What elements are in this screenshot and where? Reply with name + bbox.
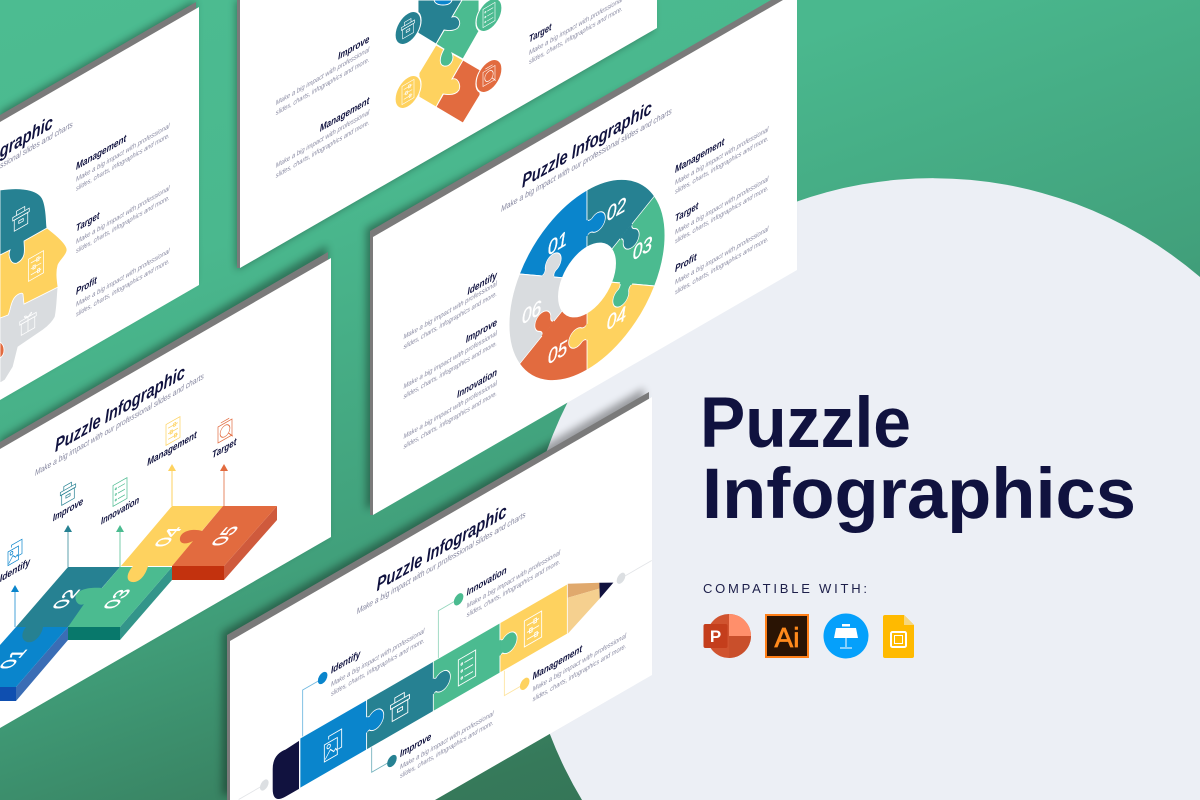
slide text: Management — [147, 429, 197, 469]
slide text: Make a big impact with professional — [76, 247, 170, 309]
panel: top slide with four piece puzzle — [236, 0, 657, 270]
slide text — [0, 43, 170, 418]
slide text: Puzzle Infographic — [377, 499, 507, 595]
step numbers: 04 — [150, 527, 187, 547]
slide text: slides, charts, infographics and more. — [533, 643, 626, 704]
head puzzle pieces — [0, 189, 67, 383]
slide text: Profit — [675, 251, 697, 275]
slide text: slides, charts, infographics and more. — [76, 132, 170, 193]
step numbers: 02 — [48, 589, 85, 609]
slide text: Make a big impact with professional — [76, 185, 170, 246]
slide text: slides, charts, infographics and more. — [467, 558, 560, 619]
slide text: Improve — [400, 731, 432, 760]
slide text: Identify — [468, 270, 497, 298]
slide text: Innovation — [467, 565, 507, 599]
slide text: Make a big impact with professional — [76, 122, 170, 184]
icon: gift — [20, 310, 36, 336]
slide text: Make a big impact with our professional slides and charts — [35, 370, 204, 478]
step numbers: 03 — [99, 589, 136, 609]
slide text: Puzzle Infographic — [522, 96, 652, 192]
slide text — [403, 28, 769, 453]
icon: sliders — [166, 417, 180, 445]
icon: Google Slides — [883, 615, 914, 658]
slide text: Make a big impact with professional — [331, 627, 425, 689]
pencil icons — [324, 611, 542, 762]
icon: sliders — [28, 251, 44, 281]
slide text: Innovation — [101, 495, 139, 528]
donut numbers: 01 — [548, 227, 567, 261]
slide text: slides, charts, infographics and more. — [76, 194, 170, 255]
slide text: Improve — [466, 317, 497, 346]
slide text: slides, charts, infographics and more. — [400, 719, 494, 780]
panel: upper left slide with head puzzle — [0, 0, 199, 418]
slide text: slides, charts, infographics and more. — [331, 637, 425, 698]
icon: target — [218, 416, 233, 445]
icon: target — [483, 63, 496, 88]
donut numbers: 06 — [522, 296, 542, 330]
slide text: Make a big impact with professional — [533, 632, 627, 694]
leader dots — [260, 571, 625, 792]
slide text: Target — [675, 200, 699, 225]
slide text — [331, 499, 627, 780]
slide text: Make a big impact with professional — [403, 280, 497, 341]
icon: Illustrator: Ai — [775, 622, 799, 653]
slide text: Improve — [338, 34, 370, 63]
icon: document — [402, 79, 414, 105]
pencil body segments — [273, 565, 613, 799]
slide text: Management — [320, 95, 370, 135]
slide text: slides, charts, infographics and more. — [529, 5, 623, 66]
icon: PowerPoint: P — [710, 627, 721, 646]
slide text: slides, charts, infographics and more. — [675, 236, 769, 297]
slide text: slides, charts, infographics and more. — [675, 185, 769, 246]
icon: box — [401, 16, 415, 40]
puzzle: four pieces with icons — [395, 0, 502, 123]
slide text — [276, 0, 623, 213]
donut puzzle — [486, 109, 688, 451]
slide text: Innovation — [457, 367, 497, 401]
slide text: Make a big impact with professional — [276, 46, 370, 107]
slide text: Target — [212, 436, 237, 462]
slide text: Make a big impact with our professional slides and charts — [357, 509, 526, 616]
slide text: Make a big impact with our professional slides and charts — [501, 105, 672, 214]
donut numbers — [522, 178, 652, 385]
step numbers — [0, 526, 244, 669]
3D puzzle pieces — [0, 506, 277, 701]
slide text: Identify — [331, 648, 361, 677]
icon: box — [13, 204, 29, 232]
slide text: slides, charts, infographics and more. — [76, 258, 170, 319]
arrows — [11, 464, 228, 627]
donut numbers: 04 — [607, 302, 626, 336]
slide text: Target — [76, 210, 100, 235]
icon: checklist — [483, 2, 495, 28]
slide text: slides, charts, infographics and more. — [403, 390, 497, 451]
panel: centre slide with donut puzzle — [366, 0, 797, 515]
slide text — [0, 330, 237, 586]
slide text: Management — [533, 643, 583, 683]
icon: image — [8, 539, 22, 566]
slide text: Make a big impact with professional — [675, 175, 769, 237]
slide text: Make a big impact with professional — [675, 225, 769, 287]
slide text: slides, charts, infographics and more. — [276, 56, 369, 117]
compatible with label: COMPATIBLE WITH: — [703, 581, 867, 596]
icon: checklist — [113, 478, 127, 506]
slide text: slides, charts, infographics and more. — [403, 290, 497, 351]
slide text: Puzzle Infographic — [55, 360, 185, 456]
slide text: Target — [529, 21, 552, 46]
title: Puzzle — [700, 384, 911, 463]
icon: PowerPoint — [704, 614, 751, 658]
title: Infographics — [702, 455, 1136, 534]
icon: box — [60, 480, 76, 506]
slide text: Management — [76, 133, 127, 173]
slide text: Make a big impact with professional — [403, 330, 497, 391]
pale circular backdrop — [523, 178, 1200, 800]
slide text: Management — [675, 136, 725, 176]
slide text: Make a big impact with professional — [675, 126, 769, 187]
slide text: Make a big impact with professional — [400, 710, 494, 771]
title — [700, 384, 1136, 534]
slide text: Improve — [53, 496, 83, 525]
panel: bottom slide with pencil puzzle — [222, 388, 652, 800]
icon: Keynote — [824, 614, 868, 658]
slide text: Identify — [0, 556, 31, 585]
pencil leader lines — [239, 560, 652, 800]
panel: left slide with 3D puzzle steps — [0, 245, 331, 728]
slide text: Make a big impact with professional — [276, 109, 370, 170]
icon: Illustrator — [766, 615, 808, 657]
slide text: slides, charts, infographics and more. — [403, 340, 497, 401]
donut numbers: 05 — [548, 336, 568, 370]
slide text: slides, charts, infographics and more. — [276, 119, 369, 180]
slide text: Make a big impact with professional — [467, 549, 561, 610]
slide text: Make a big impact with professional — [403, 380, 497, 441]
donut numbers: 02 — [607, 193, 626, 227]
step numbers: 05 — [207, 526, 244, 546]
slide text: Profit — [76, 275, 97, 298]
donut numbers: 03 — [633, 232, 652, 266]
slide text: slides, charts, infographics and more. — [675, 135, 769, 196]
